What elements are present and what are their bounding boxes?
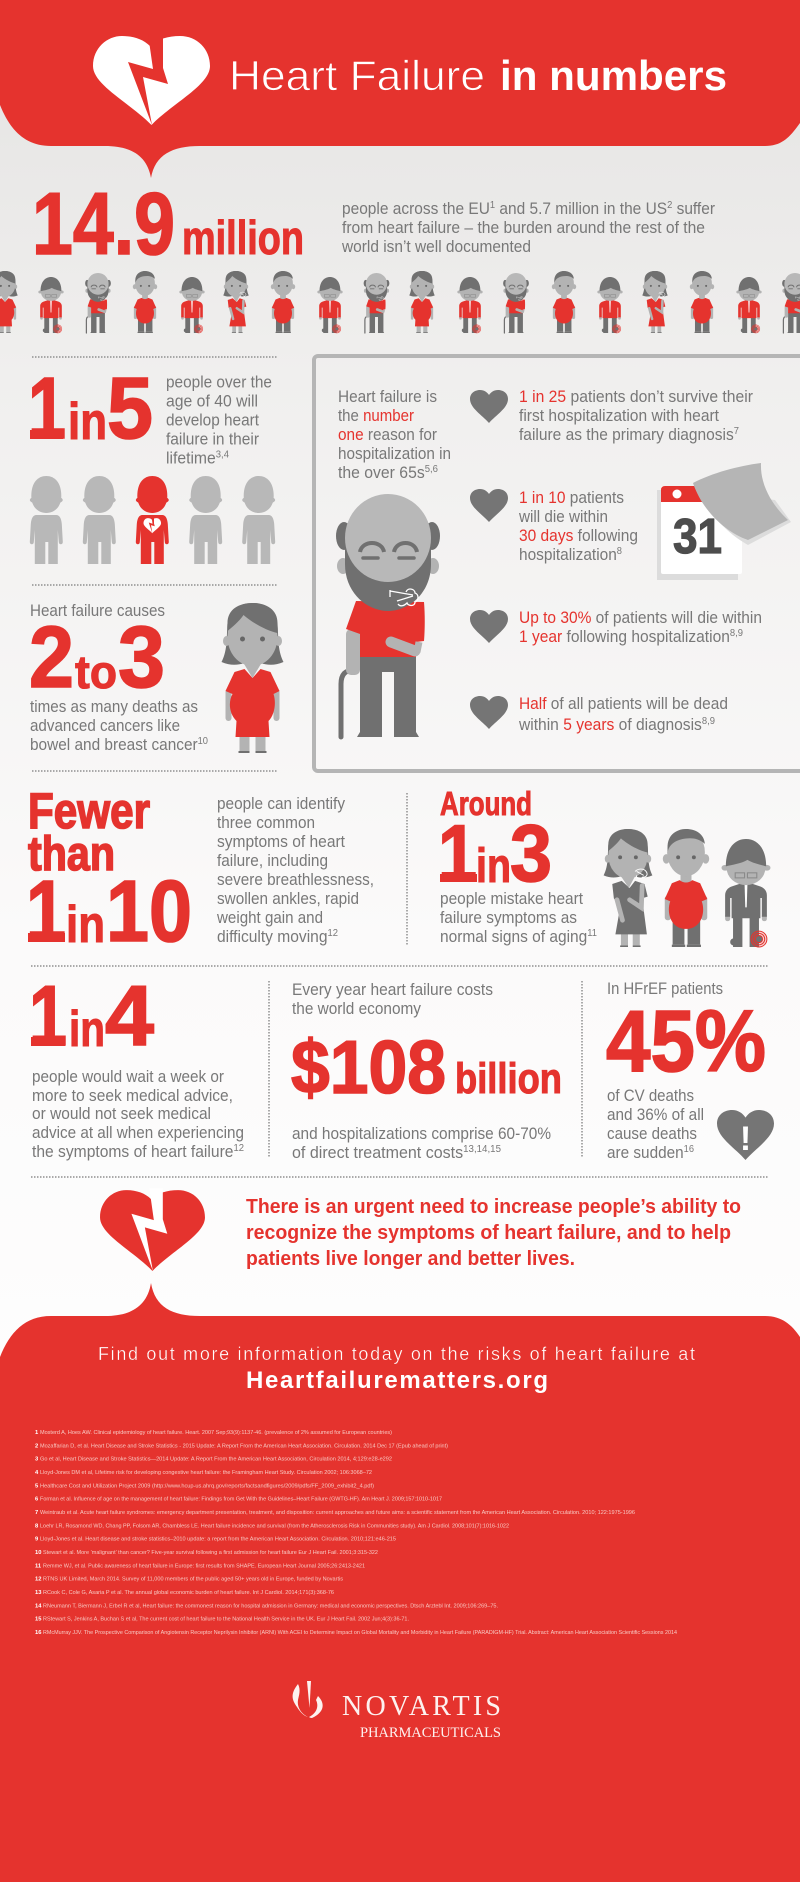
text: 2 to 3 description: advanced cancers like: [30, 717, 180, 735]
text: symptoms description: failure, including: [217, 852, 328, 870]
text: 2 to 3 description: 10: [198, 736, 208, 747]
references: Lloyd-Jones DM et al, Lifetime risk for developing congestive heart failure: the Framingham Heart Study. Circulation 2002; 106:3068–72: [40, 1470, 372, 1476]
references: 4: [35, 1470, 39, 1476]
logo: Novartis: PHARMACEUTICALS: [360, 1725, 501, 1741]
callout: urgent need: There is an urgent need to increase people’s ability to: [246, 1196, 741, 1218]
references: 15: [35, 1617, 42, 1623]
text: symptoms description: weight gain and: [216, 909, 323, 927]
icon: broken heart logo: [93, 34, 210, 125]
logo: Novartis: NOVARTIS: [342, 1691, 501, 1722]
text: symptoms description: difficulty moving: [217, 928, 334, 946]
text: number one reason: one reason for: [338, 426, 437, 444]
text: world economy cost: Every year heart failure costs: [292, 981, 493, 999]
references: 9: [35, 1537, 39, 1543]
text: seek medical advice: the symptoms of heart failure: [32, 1143, 245, 1161]
statistic: around 1 in 3: Around: [440, 785, 532, 822]
text: mistake symptoms: 11: [587, 928, 597, 939]
icon: heart with exclamation mark: !: [740, 1120, 751, 1158]
header banner: [0, 0, 800, 178]
references: 16: [35, 1630, 42, 1636]
text: sudden deaths: 16: [684, 1144, 694, 1155]
text: up to 30%: 8,9: [730, 628, 743, 639]
text: world economy cost: [292, 981, 493, 1018]
references: 14: [35, 1603, 42, 1609]
references: Healthcare Cost and Utilization Project 2009 (http://www.hcup-us.ahrq.gov/reports/factsandfigures/2009/pdfs/FF_2009_exhibit2_4.pdf): [40, 1483, 374, 1489]
text: seek medical advice: advice at all when experiencing: [32, 1124, 244, 1142]
text: find out more: Find out more information today on the risks of heart failure at: [98, 1344, 695, 1364]
text: 1 in 25: 7: [734, 426, 739, 437]
references: 7: [35, 1510, 38, 1516]
text: symptoms description: swollen ankles, rapid: [217, 890, 359, 908]
text: number one reason: the over 65s: [338, 464, 429, 482]
text: 1 in 5 description: 3,4: [216, 450, 229, 460]
references: Go et al, Heart Disease and Stroke Statistics—2014 Update: A Report From the American Heart Association, Circulation 2014, 4;129:e28-e292: [40, 1457, 392, 1463]
title: Heart Failure: [229, 52, 485, 99]
statistic: 1 in 4: 4: [105, 969, 154, 1064]
text: 1 in 25: 1 in 25 patients don’t survive their: [519, 388, 753, 406]
text: 1 in 10: 1 in 10 patients: [519, 489, 624, 507]
icon: heart 3: [470, 610, 508, 643]
references: Mosterd A, Hoes AW. Clinical epidemiology of heart failure. Heart. 2007 Sep;93(9):1137-46. (prevalence of 2% assumed for European countries): [40, 1430, 392, 1436]
text: sudden deaths: [607, 1087, 704, 1162]
text: symptoms description: [216, 795, 374, 946]
references: RTNS UK Limited, March 2014. Survey of 11,000 members of the public aged 50+ years old in Europe, funded by Novartis: [43, 1577, 343, 1583]
statistic: fewer than 1 in 10: 10: [106, 863, 192, 960]
statistic: around 1 in 3: in: [476, 840, 511, 893]
text: prevalence description: and 5.7 million in the US: [495, 200, 667, 218]
icon: calendar 31 days: [657, 463, 791, 580]
logo: Novartis: [293, 1681, 501, 1741]
illustration: three people: [604, 829, 770, 947]
references: [35, 1430, 678, 1636]
text: world economy cost: the world economy: [292, 1000, 422, 1018]
statistic: 2 to 3: 3: [118, 609, 165, 706]
text: treatment costs: [292, 1125, 551, 1162]
text: 1 in 10: [518, 489, 638, 564]
statistic: 1 in 5: 5: [107, 360, 153, 457]
references: Lloyd-Jones et al. Heart disease and stroke statistics–2010 update: a report from the American Heart Association. Circulation. 2010;121:e46-215: [40, 1537, 396, 1543]
text: symptoms description: three common: [217, 814, 315, 832]
text: number one reason: [338, 388, 451, 482]
panel: hospitalization: [314, 356, 800, 771]
text: sudden deaths: cause deaths: [607, 1125, 697, 1143]
references: Forman et al. Influence of age on the management of heart failure: Findings from Get With the Guidelines–Heart Failure (GWTG-HF). Am Heart J. 2009;157:1010-1017: [40, 1497, 442, 1503]
text: half of all patients: Half of all patients will be dead: [519, 695, 728, 713]
text: number one reason: hospitalization in: [338, 445, 451, 463]
text: seek medical advice: 12: [233, 1143, 244, 1154]
text: heart failure causes: Heart failure causes: [30, 602, 165, 620]
statistic: around 1 in 3: [438, 785, 552, 899]
text: sudden deaths: and 36% of all: [607, 1106, 704, 1124]
callout: urgent need: recognize the symptoms of heart failure, and to help: [246, 1222, 731, 1244]
references: RStewart S, Jenkins A, Buchan S et al, The current cost of heart failure to the National Health Service in the UK. Eur J Heart Fail. 2002 Jun;4(3):36-71.: [43, 1617, 409, 1623]
title: in numbers: [500, 52, 727, 99]
references: Remme WJ, et al. Public awareness of heart failure in Europe: first results from SHAPE. European Heart Journal 2005;26:2413-2421: [43, 1563, 365, 1569]
text: website: Heartfailurematters.org: [246, 1367, 548, 1394]
references: 3: [35, 1457, 39, 1463]
text: 1 in 5 description: people over the: [166, 374, 272, 392]
text: prevalence description: 2: [667, 200, 673, 211]
text: 1 in 25: failure as the primary diagnosis: [519, 426, 747, 444]
callout: urgent need: patients live longer and better lives.: [246, 1248, 575, 1270]
icon: heart 1: [470, 390, 508, 423]
text: treatment costs: of direct treatment costs: [292, 1144, 468, 1162]
illustration: bald man with cane: [336, 494, 440, 737]
footer panel: [0, 1283, 800, 1882]
text: prevalence description: from heart failure – the burden around the rest of the: [342, 219, 705, 237]
text: number one reason: 5,6: [425, 464, 438, 475]
text: 1 in 25: first hospitalization with heart: [519, 407, 719, 425]
references: 10: [35, 1550, 41, 1556]
text: symptoms description: symptoms of heart: [217, 833, 345, 851]
references: 6: [35, 1497, 39, 1503]
text: mistake symptoms: [440, 890, 597, 946]
statistic: 1 in 5: 1: [28, 360, 66, 457]
text: 1 in 10: 30 days following: [519, 527, 638, 545]
references: 8: [35, 1523, 39, 1529]
statistic: around 1 in 3: 3: [510, 809, 552, 899]
text: 1 in 10: 8: [617, 546, 622, 557]
text: treatment costs: and hospitalizations comprise 60-70%: [292, 1125, 551, 1143]
text: symptoms description: severe breathlessness,: [217, 871, 374, 889]
statistic: 2 to 3: to: [75, 646, 117, 698]
references: Weintraub et al. Acute heart failure syndromes: emergency department presentation, treatment, and disposition: current approaches and future aims: a scientific statement from the American Heart Association. Circulation. 2010; 122:1975-1996: [40, 1510, 635, 1516]
text: seek medical advice: or would not seek medical: [32, 1105, 211, 1123]
icon: calendar 31 days: 31: [673, 510, 722, 564]
references: RMcMurray JJV. The Prospective Comparison of Angiotensin Receptor Neprilysin Inhibitor (ARNI) With ACEI to Determine Impact on Global Mortality and Morbidity in Heart Failure (PARADIGM-HF) Trial. Abstract: American Heart Association Scientific Sessions 2014: [43, 1630, 678, 1636]
icon: heart with exclamation mark: [717, 1110, 774, 1160]
statistic: 1 in 4: 1: [29, 969, 67, 1064]
statistic: 14.9 million: million: [182, 211, 304, 264]
text: HFrEF patients: In HFrEF patients: [607, 980, 723, 998]
references: 2: [35, 1443, 38, 1449]
statistic: fewer than 1 in 10: in: [66, 896, 105, 954]
references: RCook C, Cole G, Asaria P et al. The annual global economic burden of heart failure. Int J Cardiol. 2014;171(3):368-76: [43, 1590, 334, 1596]
text: symptoms description: people can identify: [217, 795, 346, 813]
text: seek medical advice: [32, 1068, 244, 1161]
text: 1 in 5 description: failure in their: [166, 430, 259, 448]
text: half of all patients: within 5 years of diagnosis: [519, 716, 707, 734]
statistic: $108 billion: $108: [291, 1025, 446, 1109]
statistic: 2 to 3: 2: [29, 609, 74, 706]
text: 1 in 5 description: lifetime: [166, 450, 218, 468]
icon: red broken heart: [100, 1188, 205, 1271]
references: Stewart et al. More ‘malignant’ than cancer? Five-year survival following a first admission for heart failure Eur J Heart Fail. 2001;3:315-322: [43, 1550, 378, 1556]
text: up to 30%: 1 year following hospitalization: [519, 628, 740, 646]
text: number one reason: the number: [338, 407, 414, 425]
statistic: fewer than 1 in 10: 1: [26, 863, 66, 960]
references: 12: [35, 1577, 41, 1583]
statistic: 1 in 5: [28, 360, 153, 457]
statistic: fewer than 1 in 10: than: [28, 828, 115, 881]
text: mistake symptoms: normal signs of aging: [440, 928, 597, 946]
statistic: 1 in 4: [29, 969, 154, 1064]
text: 2 to 3 description: times as many deaths as: [30, 698, 198, 716]
statistic: $108 billion: billion: [455, 1055, 562, 1103]
title: [229, 52, 727, 99]
text: up to 30%: Up to 30% of patients will die within: [519, 609, 762, 627]
illustration: woman in red dress: [222, 603, 284, 753]
text: prevalence description: world isn’t well documented: [341, 238, 531, 256]
statistic: 14.9 million: [32, 174, 304, 273]
statistic: 1 in 5: in: [68, 393, 107, 451]
references: RNeumann T, Biermann J, Erbel R et al, Heart failure: the commonest reason for hospital admission in Germany: medical and economic perspectives. Dtsch Arztebl Int. 2009;106:269–75.: [43, 1603, 498, 1609]
text: up to 30%: [519, 609, 762, 646]
references: 1: [35, 1430, 39, 1436]
references: Loehr LR, Rosamond WD, Chang PP, Folsom AR, Chambless LE. Heart failure incidence and survival (from the Atherosclerosis Risk in Communities study). Am J Cardiol. 2008;101(7):1016-1022: [40, 1523, 509, 1529]
text: 1 in 10: hospitalization: [519, 546, 624, 564]
statistic: around 1 in 3: 1: [438, 809, 477, 899]
statistic: fewer than 1 in 10: [26, 783, 192, 960]
text: prevalence description: [341, 200, 715, 256]
callout: urgent need: [246, 1196, 741, 1270]
row of people illustrations: [0, 271, 800, 333]
statistic: fewer than 1 in 10: Fewer: [28, 783, 150, 839]
text: half of all patients: [518, 695, 728, 734]
pictogram: five people, one red: [30, 476, 275, 564]
statistic: 45%: 45%: [606, 993, 766, 1090]
statistic: $108 billion: [291, 1025, 562, 1109]
icon: heart 4: [470, 696, 508, 729]
text: seek medical advice: people would wait a week or: [32, 1068, 224, 1086]
statistic: 14.9 million: 14.9: [32, 174, 175, 273]
references: 11: [35, 1563, 42, 1569]
text: symptoms description: 12: [328, 928, 338, 939]
text: half of all patients: 8,9: [702, 716, 715, 727]
text: prevalence description: people across the EU: [342, 200, 500, 218]
statistic: 1 in 4: in: [69, 1001, 105, 1057]
text: seek medical advice: more to seek medical advice,: [32, 1087, 233, 1105]
text: sudden deaths: are sudden: [607, 1144, 690, 1162]
references: 13: [35, 1590, 42, 1596]
statistic: 2 to 3: [29, 609, 165, 706]
text: 1 in 5 description: age of 40 will: [166, 392, 258, 410]
text: number one reason: Heart failure is: [338, 388, 437, 406]
text: mistake symptoms: failure symptoms as: [440, 909, 577, 927]
text: treatment costs: 13,14,15: [463, 1144, 501, 1155]
text: mistake symptoms: people mistake heart: [440, 890, 583, 908]
text: 2 to 3 description: [30, 698, 208, 754]
text: prevalence description: suffer: [672, 200, 715, 218]
text: 2 to 3 description: bowel and breast cancer: [30, 736, 210, 754]
references: Mozaffarian D, et al. Heart Disease and Stroke Statistics - 2015 Update: A Report From the American Heart Association. Circulation. 2014 Dec 17 (Epub ahead of print): [40, 1443, 448, 1449]
text: 1 in 10: will die within: [518, 508, 608, 526]
text: 1 in 5 description: [166, 374, 272, 468]
icon: heart 2: [470, 489, 508, 522]
text: sudden deaths: of CV deaths: [607, 1087, 694, 1105]
text: 1 in 5 description: develop heart: [166, 412, 259, 430]
text: 1 in 25: [519, 388, 753, 444]
references: 5: [35, 1483, 39, 1489]
text: prevalence description: 1: [490, 200, 496, 211]
